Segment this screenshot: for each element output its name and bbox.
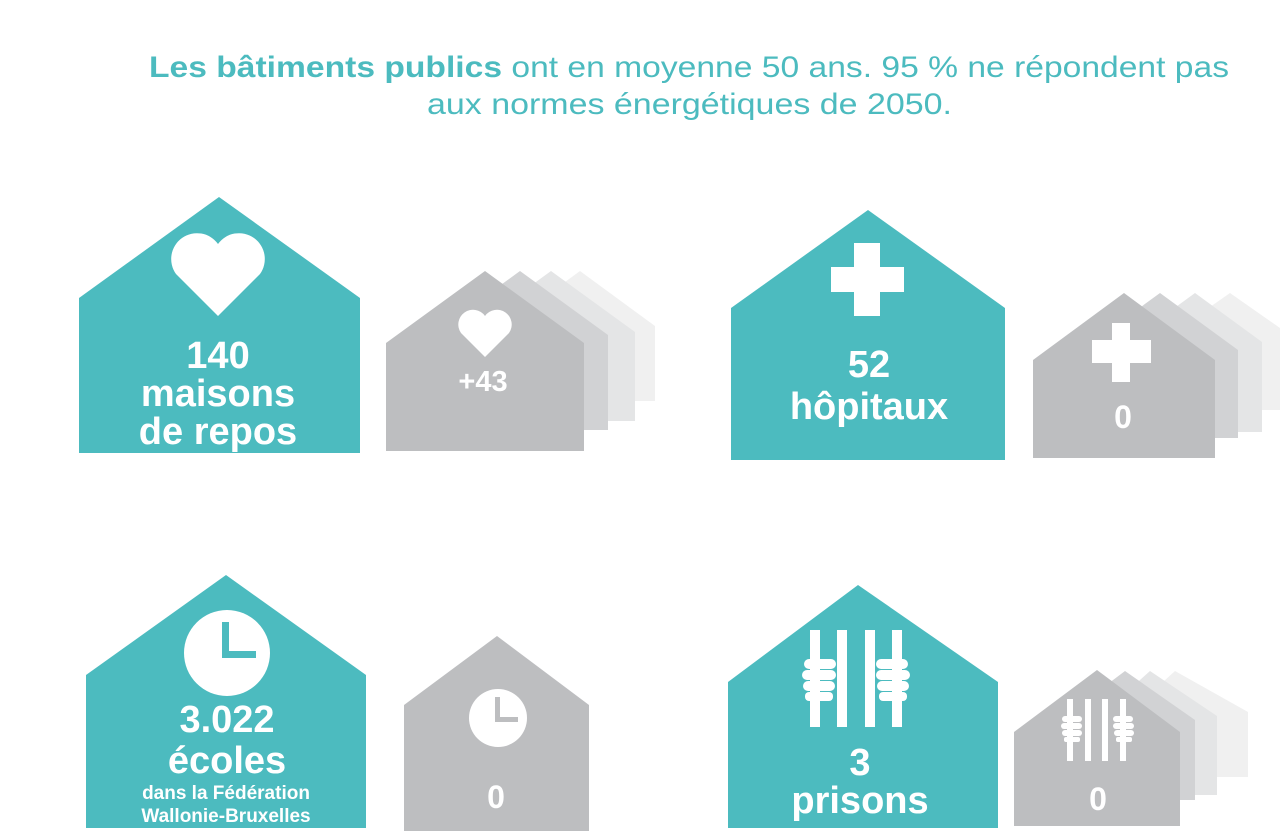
icon: heart small [458, 310, 512, 357]
panel: prisons [728, 585, 1248, 828]
teal house: 3.022 écoles: écoles [168, 740, 286, 782]
gray house stack: +43 [386, 271, 655, 451]
teal house: 52 hôpitaux: hôpitaux [790, 386, 948, 428]
teal house: 140 maisons de repos: de repos [139, 411, 297, 453]
gray house stack: 0: 0 [1089, 781, 1107, 817]
icon: clock [184, 610, 270, 696]
teal house: 52 hôpitaux [731, 210, 1005, 460]
title: aux normes énergétiques de 2050. [427, 88, 952, 121]
teal house: 3.022 écoles: 3.022 [179, 699, 275, 741]
icon: prison bars small [1061, 699, 1134, 761]
teal house: 3 prisons: 3 [849, 742, 871, 784]
teal house: 140 maisons de repos: 140 [186, 335, 250, 377]
icon: clock small [469, 689, 527, 747]
teal house: 140 maisons de repos: maisons [141, 373, 295, 415]
gray house stack: 0 [1033, 293, 1280, 458]
icon: heart [171, 233, 265, 316]
teal house: 3.022 écoles: dans la Fédération [142, 783, 310, 804]
gray house stack: 0: 0 [1114, 399, 1132, 435]
gray house stack: 0 [1014, 670, 1248, 826]
icon: cross small [1092, 323, 1151, 382]
panel: maisons de repos [79, 197, 655, 453]
teal house: 3 prisons: prisons [791, 780, 929, 822]
teal house: 3 prisons [728, 585, 998, 828]
icon: prison bars with hands [802, 630, 910, 727]
gray house: 0 [404, 636, 589, 831]
title: Les bâtiments publics ont en moyenne 50 ans. 95 % ne répondent pas [149, 51, 1229, 84]
panel: hôpitaux [731, 210, 1280, 460]
icon: cross [831, 243, 904, 316]
panel: écoles [86, 575, 589, 831]
title [149, 51, 1229, 121]
gray house: 0: 0 [487, 779, 505, 815]
teal house: 3.022 écoles: Wallonie-Bruxelles [141, 806, 311, 827]
teal house: 3.022 écoles [86, 575, 366, 828]
teal house: 52 hôpitaux: 52 [848, 344, 890, 386]
teal house: 140 maisons de repos [79, 197, 360, 453]
gray house stack: +43: +43 [458, 366, 508, 398]
